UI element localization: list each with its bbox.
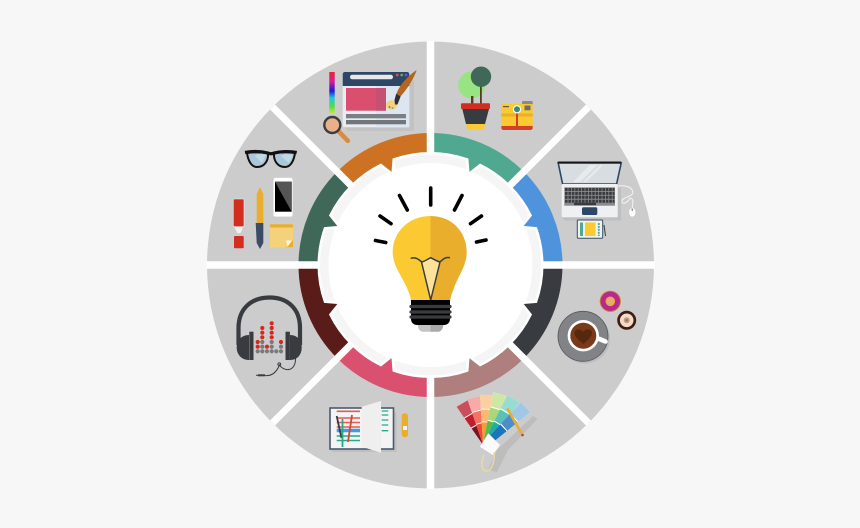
- icon: pen: [256, 187, 263, 249]
- fan shadow: [488, 416, 538, 472]
- swatch: teal: [480, 395, 519, 448]
- swatch: orange: [479, 395, 494, 444]
- ring segment: green: [430, 133, 524, 185]
- cup handle: [597, 338, 606, 342]
- ring segment: dusty rose: [430, 345, 524, 397]
- book cover: [330, 408, 394, 449]
- icon: plant pot: [458, 66, 491, 130]
- bulb tip: [418, 325, 430, 332]
- window: [343, 72, 409, 127]
- icon: colour swatch fan: [457, 392, 538, 472]
- ring segment: blue: [510, 172, 562, 265]
- bulb glass: [393, 216, 430, 301]
- icon: open book: [329, 401, 396, 453]
- icon: headphones: [237, 298, 302, 376]
- spectrum bar: [329, 72, 335, 114]
- icon: sticky note: [270, 224, 293, 247]
- icon: chocolate donut: [617, 311, 636, 330]
- swatch: green: [479, 392, 506, 446]
- swatch tag: [480, 433, 500, 455]
- magnifier: [324, 117, 348, 141]
- cup and coffee: [568, 320, 599, 351]
- icon: web design window: [324, 70, 417, 141]
- book shadow: [329, 411, 396, 452]
- bulb rays: [376, 188, 486, 242]
- laptop base: [562, 184, 618, 217]
- latte heart: [574, 329, 592, 344]
- cup shadow: [560, 314, 610, 364]
- icon: coffee cup: [558, 311, 610, 364]
- tag loop: [482, 452, 494, 471]
- window shadow: [344, 76, 414, 131]
- ring segment: charcoal: [510, 265, 562, 358]
- fan blades: [457, 392, 530, 449]
- bulb base: [411, 300, 450, 325]
- audio cable: [256, 358, 296, 376]
- icon: glasses: [245, 152, 297, 167]
- right ear cup: [290, 335, 302, 360]
- filament: [411, 257, 450, 300]
- icon: light bulb: [376, 188, 486, 332]
- icon: laptop: [558, 162, 636, 238]
- text lines right: [382, 411, 388, 431]
- palette and brush: [386, 70, 417, 110]
- swatch: blue: [481, 402, 530, 449]
- swatch: red: [457, 400, 492, 447]
- laptop shadow: [562, 186, 621, 220]
- headband: [238, 298, 300, 345]
- icon: red marker: [233, 199, 244, 248]
- centre hub with coloured ring: [206, 41, 654, 489]
- icon: pink donut: [600, 291, 621, 312]
- icon: instant camera: [501, 101, 533, 130]
- white centre disc: [328, 163, 532, 367]
- icon: smartphone: [273, 178, 293, 217]
- wheel disc: eight grey sectors: [207, 42, 654, 488]
- turned page: [362, 401, 381, 453]
- mouse and cable: [618, 186, 636, 217]
- pencil: [507, 408, 524, 436]
- touchpad: [582, 207, 597, 215]
- ring segment: pink: [337, 345, 430, 397]
- equalizer dots: [256, 321, 283, 353]
- pens: [337, 415, 352, 447]
- text lines left: [337, 411, 360, 440]
- ring segment: orange: [337, 133, 430, 185]
- icon: USB stick: [402, 413, 408, 437]
- light grey gear ring: [320, 154, 541, 376]
- left ear cup: [237, 335, 249, 360]
- tablet: [577, 220, 606, 238]
- keyboard: [564, 187, 615, 206]
- swatch: coral: [467, 396, 493, 446]
- ring segment: maroon: [298, 265, 351, 358]
- laptop screen: [558, 162, 622, 184]
- saucer: [558, 311, 608, 361]
- ring segment: dark green: [298, 172, 351, 265]
